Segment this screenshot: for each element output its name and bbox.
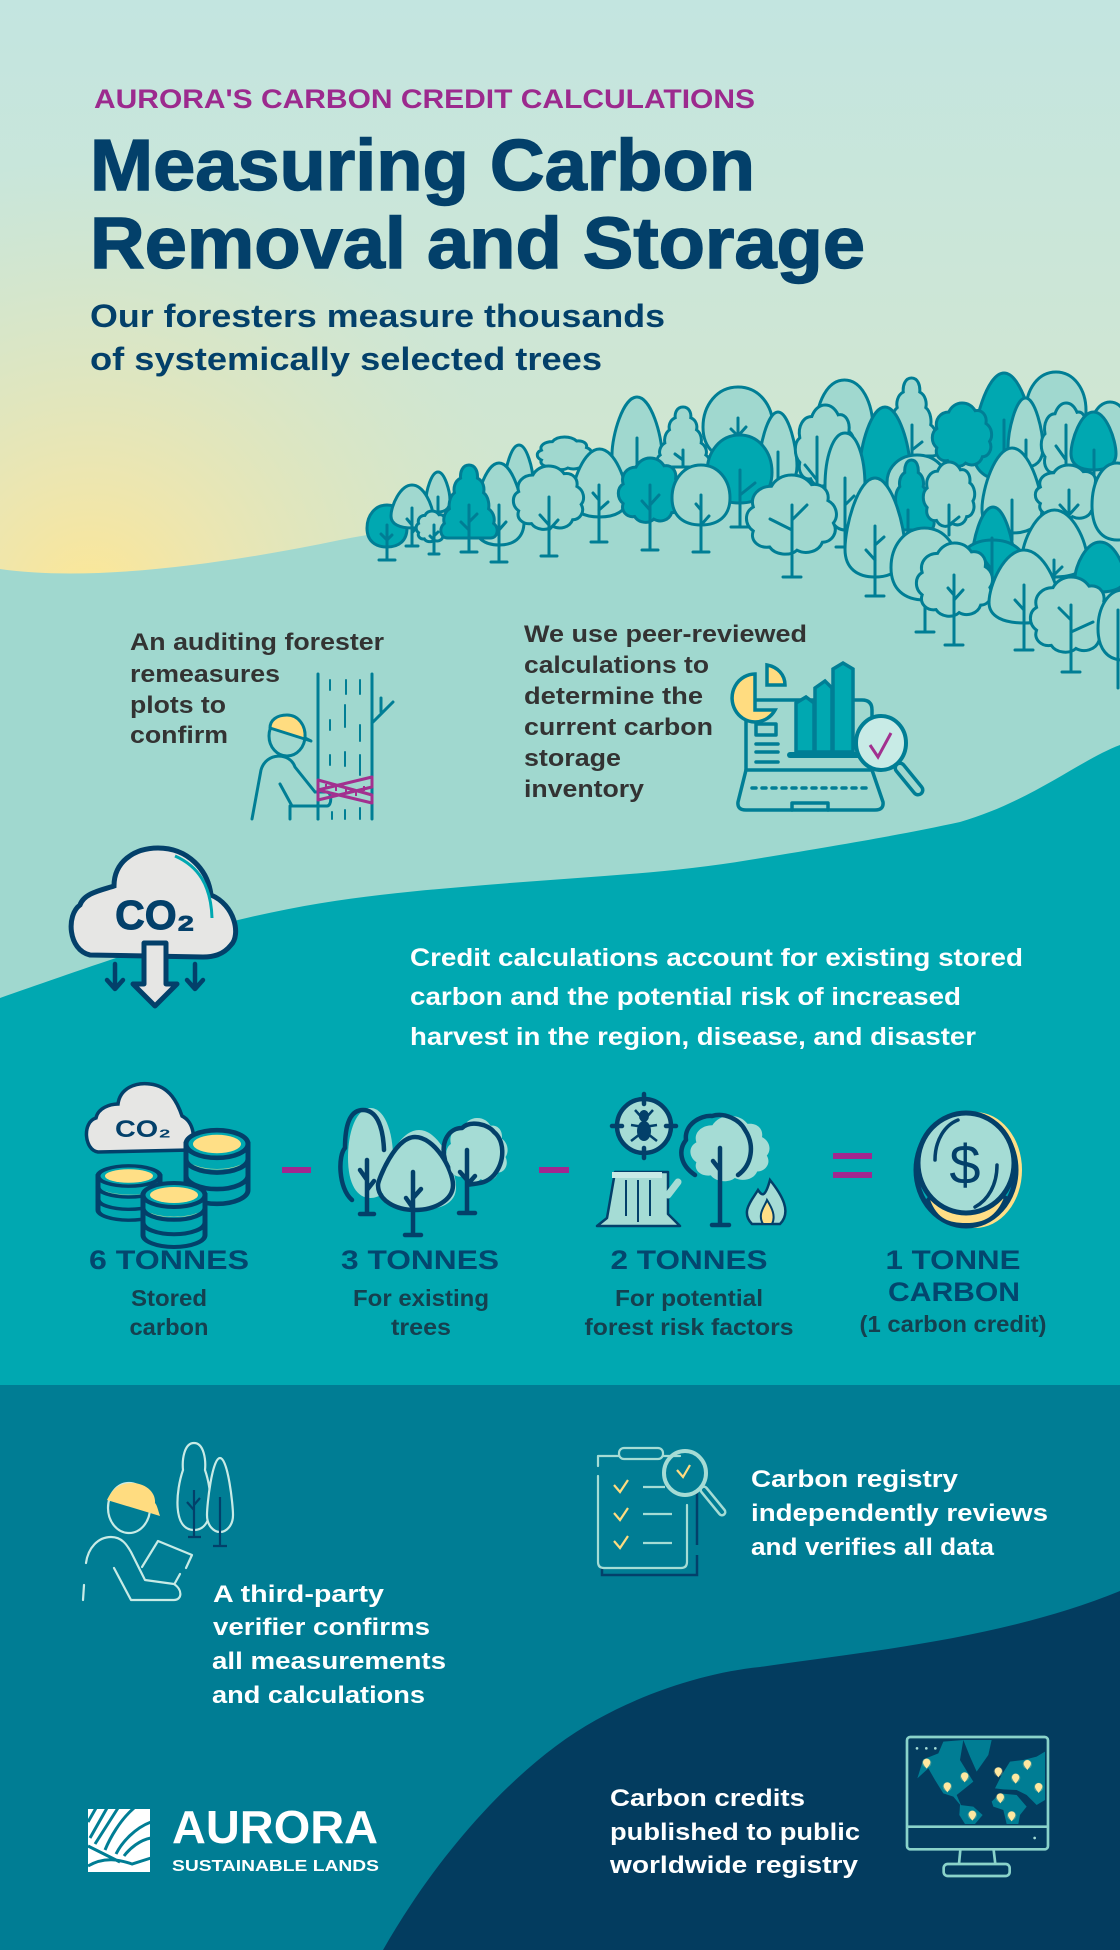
label: 6 tonnes stored carbon [89, 1245, 249, 1340]
label: 3 tonnes existing trees [341, 1245, 499, 1340]
label: 1 tonne carbon: 1 TONNE [886, 1245, 1020, 1275]
icon: forester measuring a tree [252, 674, 393, 819]
icon: dollar coin: $ [949, 1133, 981, 1196]
label: 1 tonne carbon: (1 carbon credit) [860, 1311, 1046, 1337]
icon: CO2 cloud with down arrows [71, 848, 236, 1006]
icon: CO2 cloud with down arrows: CO₂ [115, 892, 195, 938]
subtitle: Our foresters measure thousands [90, 298, 665, 334]
operator: minus 1 [282, 1167, 311, 1173]
operator: equals [833, 1153, 872, 1178]
subtitle [90, 298, 665, 377]
text: carbon registry: independently reviews [751, 1500, 1048, 1527]
text: carbon credits published: published to public [610, 1819, 860, 1846]
text: auditing forester: remeasures [130, 661, 280, 688]
text: carbon registry: Carbon registry [751, 1466, 959, 1493]
text: carbon credits published: worldwide registry [609, 1852, 859, 1879]
logo: Aurora Sustainable Lands [88, 1801, 379, 1875]
label: 2 tonnes forest risk factors: For potential [615, 1285, 763, 1311]
background: light green hill [0, 430, 1120, 1000]
label: 3 tonnes existing trees: trees [391, 1314, 451, 1340]
icon: monitor with world map [907, 1737, 1048, 1876]
text: carbon registry [751, 1466, 1048, 1561]
text: third-party verifier: verifier confirms [213, 1614, 430, 1641]
background: teal band [0, 745, 1120, 1400]
icon: forest risk factors (bug, stump, tree, fire) [597, 1094, 785, 1226]
background: dark teal section [0, 1385, 1120, 1950]
text: peer-reviewed calculations [524, 621, 807, 803]
operator: minus 2 [539, 1167, 569, 1173]
text: peer-reviewed calculations: determine the [524, 683, 703, 710]
subtitle: of systemically selected trees [90, 341, 602, 377]
text: credit calculations: carbon and the potential risk of increased [410, 983, 961, 1011]
text: auditing forester: plots to [130, 692, 226, 719]
background: navy corner [383, 1591, 1120, 1950]
label: 6 tonnes stored carbon: Stored [131, 1285, 207, 1311]
icon: dollar coin [916, 1112, 1022, 1228]
text: third-party verifier: A third-party [213, 1581, 385, 1608]
label: 1 tonne carbon [860, 1245, 1046, 1337]
text: third-party verifier [212, 1581, 446, 1709]
icon: laptop with charts and magnifier [732, 663, 918, 810]
main heading [90, 126, 865, 284]
text: peer-reviewed calculations: calculations to [524, 652, 709, 679]
text: third-party verifier: all measurements [212, 1648, 446, 1675]
icon: verifier with clipboard and trees [83, 1443, 233, 1600]
logo: Aurora Sustainable Lands: SUSTAINABLE LANDS [172, 1858, 379, 1875]
main heading: Measuring Carbon [90, 126, 755, 206]
text: auditing forester: confirm [130, 722, 228, 749]
text: peer-reviewed calculations: We use peer-reviewed [524, 621, 807, 648]
text: auditing forester [130, 629, 384, 749]
logo: Aurora Sustainable Lands: AURORA [172, 1801, 378, 1853]
label: 1 tonne carbon: CARBON [888, 1277, 1020, 1307]
icon: CO2 cloud and coin stacks: CO₂ [115, 1116, 171, 1143]
text: peer-reviewed calculations: current carbon [524, 714, 713, 741]
label: 2 tonnes forest risk factors [584, 1245, 794, 1340]
icon: existing trees [340, 1108, 508, 1235]
background: sky gradient [0, 0, 1120, 700]
text: credit calculations [410, 944, 1023, 1051]
text: credit calculations: Credit calculations account for existing stored [410, 944, 1023, 972]
text: peer-reviewed calculations: storage [524, 745, 621, 772]
text: peer-reviewed calculations: inventory [524, 776, 645, 803]
label: 3 tonnes existing trees: 3 TONNES [341, 1245, 499, 1275]
label: 2 tonnes forest risk factors: forest risk factors [584, 1314, 794, 1340]
text: carbon credits published [609, 1785, 860, 1879]
label: 3 tonnes existing trees: For existing [353, 1285, 489, 1311]
label: 2 tonnes forest risk factors: 2 TONNES [610, 1245, 768, 1275]
eyebrow title: AURORA'S CARBON CREDIT CALCULATIONS [94, 84, 755, 114]
text: credit calculations: harvest in the region, disease, and disaster [410, 1023, 976, 1051]
text: auditing forester: An auditing forester [130, 629, 384, 656]
illustration: forest of trees [367, 372, 1120, 688]
label: 6 tonnes stored carbon: 6 TONNES [89, 1245, 249, 1275]
text: carbon credits published: Carbon credits [610, 1785, 805, 1812]
icon: checklist with magnifier [598, 1448, 722, 1575]
text: third-party verifier: and calculations [212, 1682, 425, 1709]
main heading: Removal and Storage [90, 204, 865, 284]
label: 6 tonnes stored carbon: carbon [130, 1314, 208, 1340]
text: carbon registry: and verifies all data [751, 1534, 995, 1561]
icon: CO2 cloud and coin stacks [86, 1084, 248, 1247]
